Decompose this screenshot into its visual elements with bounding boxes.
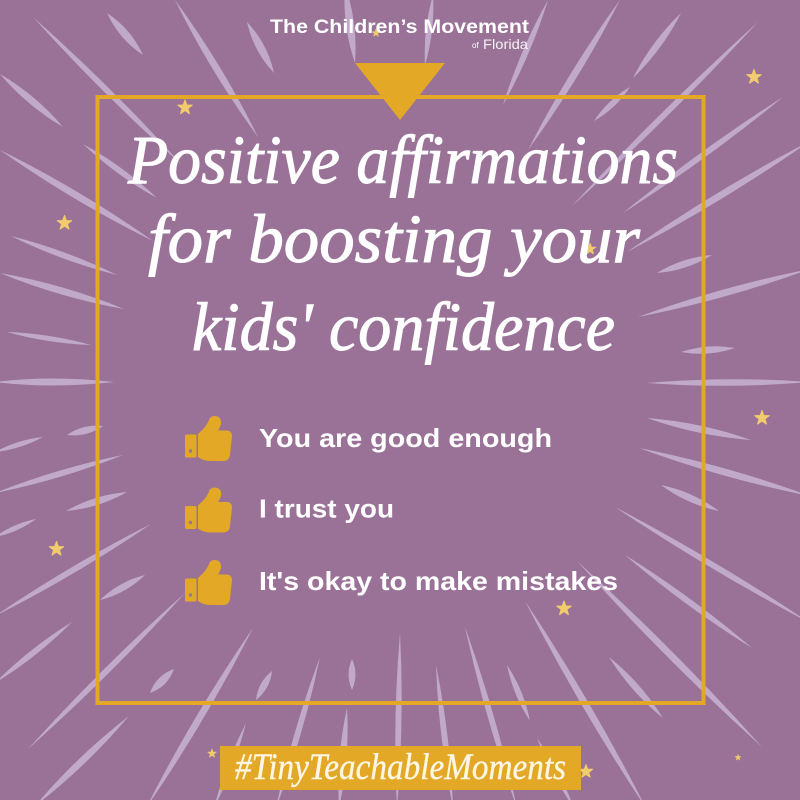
header logo: Florida bbox=[483, 36, 528, 52]
affirmation text 3: It's okay to make mistakes bbox=[259, 566, 618, 596]
gold triangle marker bbox=[355, 63, 445, 120]
hashtag text: #TinyTeachableMoments bbox=[235, 747, 566, 788]
title: Positive affirmations bbox=[127, 122, 678, 198]
affirmation text 1: You are good enough bbox=[259, 423, 552, 453]
title: for boosting your bbox=[148, 201, 641, 277]
header logo: The Children’s Movement bbox=[270, 17, 530, 38]
icon: thumbs up 3 bbox=[185, 560, 232, 605]
icon: thumbs up 1 bbox=[185, 416, 232, 461]
title bbox=[127, 122, 678, 365]
header logo bbox=[270, 17, 530, 52]
title: kids' confidence bbox=[192, 289, 615, 365]
gold frame bbox=[98, 97, 704, 703]
icon: thumbs up 2 bbox=[185, 488, 232, 532]
affirmation 2 bbox=[185, 488, 394, 532]
affirmation 3 bbox=[185, 560, 618, 605]
header logo: of bbox=[472, 41, 479, 50]
affirmation text 2: I trust you bbox=[259, 494, 394, 524]
affirmation 1 bbox=[185, 416, 552, 461]
hashtag banner bbox=[220, 746, 581, 790]
